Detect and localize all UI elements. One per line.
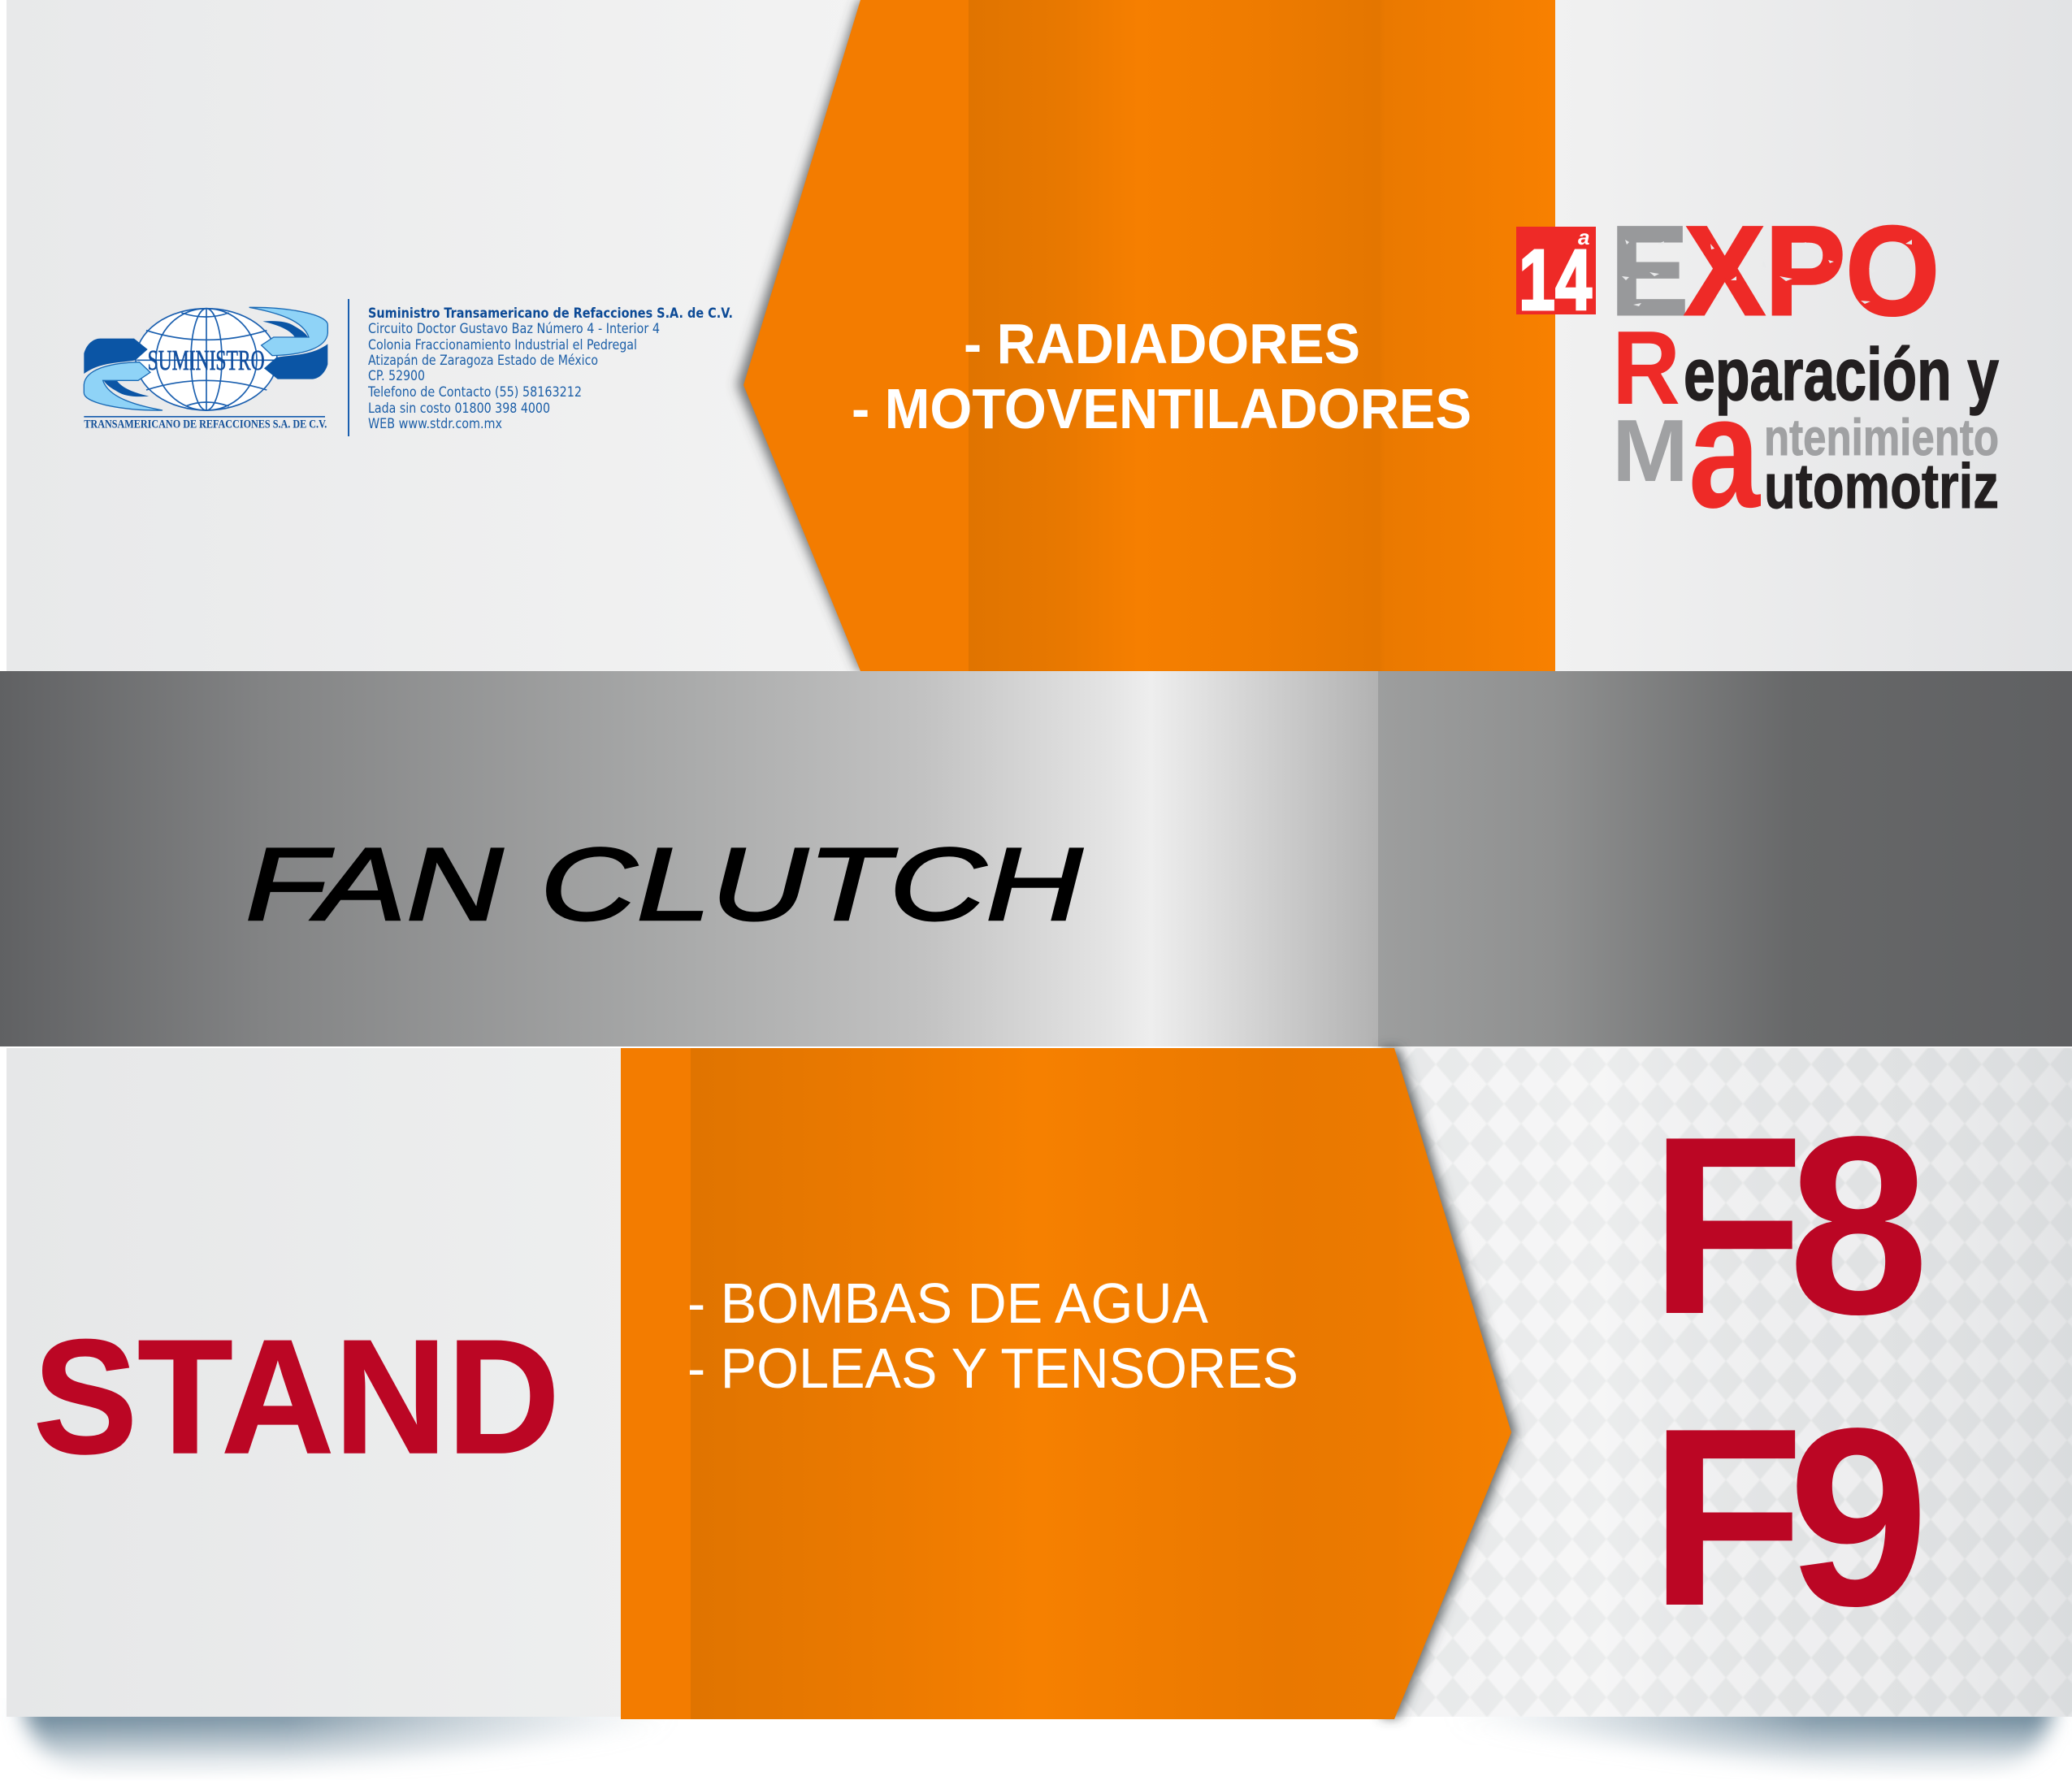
product list: bombas de agua: - BOMBAS DE AGUA — [687, 1272, 1208, 1335]
expo logo — [1516, 201, 1999, 541]
heading: Automotriz: utomotriz — [1764, 450, 1999, 522]
panel: top left background — [7, 0, 868, 671]
heading: Mantenimiento: ntenimiento — [1764, 409, 1999, 466]
contact text block: Lada sin costo 01800 398 4000 — [368, 401, 550, 417]
panel: bottom orange arrow — [621, 1048, 1511, 1719]
product list: radiadores: - RADIADORES — [964, 312, 1360, 375]
contact text block: Suministro Transamericano de Refacciones S.A. de C.V. — [368, 305, 733, 322]
heading: Reparacion y — [1612, 310, 1999, 427]
legal name: TRANSAMERICANO DE REFACCIONES S.A. DE C.V. — [84, 418, 327, 431]
panel: gray band — [0, 671, 2072, 1046]
heading: Mantenimiento — [1612, 401, 1999, 500]
shadow of bottom orange arrow — [1381, 1048, 1516, 1718]
divider line — [348, 299, 349, 436]
badge: 14a: a — [1578, 225, 1589, 249]
contact text block: Atizapán de Zaragoza Estado de México — [368, 353, 598, 369]
heading: EXPO: XPO — [1684, 201, 1940, 342]
product list: poleas y tensores: - POLEAS Y TENSORES — [687, 1337, 1298, 1400]
ribbon left — [84, 339, 163, 410]
panel: top right background — [1555, 0, 2072, 671]
contact text block: Telefono de Contacto (55) 58163212 — [367, 384, 582, 401]
shadow of top orange arrow — [737, 0, 892, 671]
contact text block: CP. 52900 — [368, 368, 425, 384]
heading: FAN CLUTCH: FAN CLUTCH — [245, 826, 1082, 942]
panel: top orange arrow — [743, 0, 1555, 671]
contact text block: Circuito Doctor Gustavo Baz Número 4 - Interior 4 — [368, 321, 660, 337]
bottom shadow: right — [1498, 1717, 2067, 1774]
stand number: F9: F9 — [1649, 1376, 1929, 1659]
badge: 14a: 14 — [1519, 232, 1592, 328]
contact text block — [367, 305, 733, 432]
label: STAND: STAND — [33, 1306, 560, 1488]
heading: EXPO: E — [1610, 201, 1688, 342]
bottom shadow: left — [10, 1717, 629, 1774]
panel: bottom left background — [7, 1048, 640, 1717]
wordmark: SUMINISTRO: SUMINISTRO — [148, 345, 265, 376]
panel: diamond pattern — [1381, 1046, 2072, 1717]
product list: motoventiladores: - MOTOVENTILADORES — [852, 377, 1472, 440]
contact text block: Colonia Fraccionamiento Industrial el Pedregal — [368, 337, 637, 353]
contact text block: WEB www.stdr.com.mx — [368, 416, 502, 432]
globe — [136, 309, 278, 410]
stand number: F8: F8 — [1649, 1085, 1929, 1367]
panel: company logo and contact — [84, 299, 733, 436]
heading: Automotriz: a — [1688, 363, 1762, 541]
heading: Reparacion y: R — [1612, 310, 1680, 427]
underline — [84, 416, 325, 418]
ribbon right — [249, 307, 327, 379]
logo: Suministro globe emblem — [84, 307, 327, 431]
heading: Mantenimiento: M — [1612, 401, 1688, 500]
heading: Automotriz — [1688, 363, 1999, 541]
